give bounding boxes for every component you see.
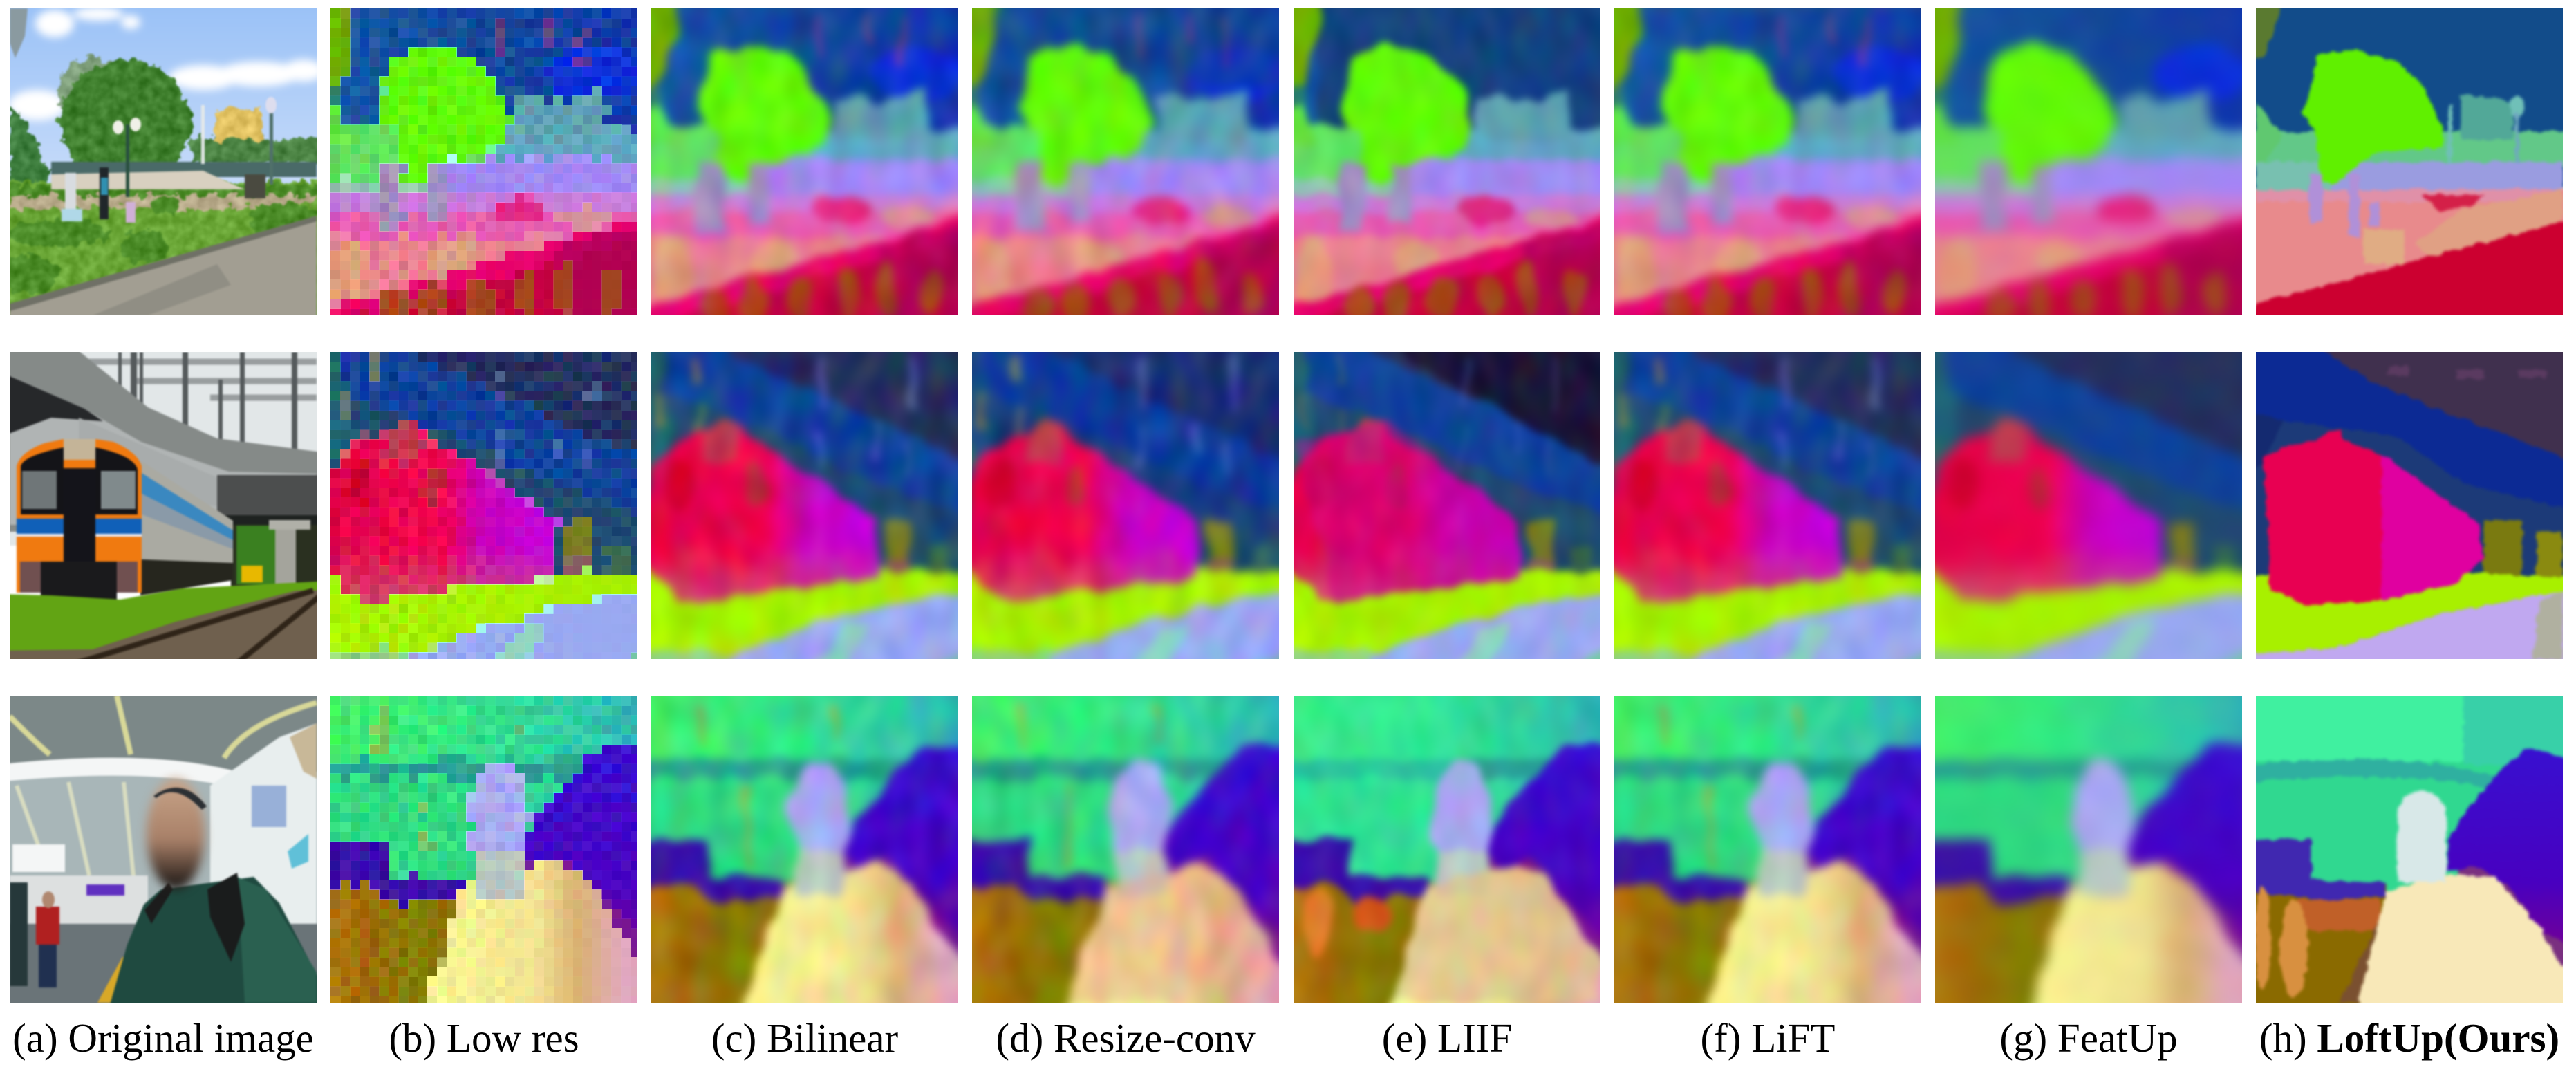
caption: (f) LiFT: (f) LiFT xyxy=(1701,1015,1835,1061)
caption: (g) FeatUp: (g) FeatUp xyxy=(1999,1015,2178,1061)
panel: row 1 bilinear features xyxy=(651,8,958,315)
panel: row 1 LoftUp features xyxy=(2256,8,2563,315)
panel: row 3 resize-conv features xyxy=(931,654,1325,1048)
panel: row 2 LoftUp features xyxy=(2256,352,2563,659)
panel: row 3 LiFT features xyxy=(1573,654,1967,1048)
caption: (b) Low res: (b) Low res xyxy=(389,1015,579,1061)
panel: row 1 low res features xyxy=(330,8,637,315)
panel: row 3 LoftUp features xyxy=(2228,668,2576,1035)
panel: row 2 FeatUp features xyxy=(1935,352,2242,659)
caption: (h) LoftUp(Ours): (h) LoftUp(Ours) xyxy=(2259,1015,2559,1061)
panel: row 2 original image, train under viaduct xyxy=(10,352,317,659)
panel: row 1 LIIF features xyxy=(1294,8,1600,315)
panel: row 3 FeatUp features xyxy=(1894,654,2288,1048)
panel: row 3 original image, man in train station xyxy=(10,696,317,1003)
panel: row 2 LIIF features xyxy=(1294,352,1600,659)
panel: row 3 bilinear features xyxy=(651,696,958,1003)
panel: row 1 original image, park scene xyxy=(10,8,317,315)
panel: row 2 low res features xyxy=(330,352,637,659)
panel: row 3 LIIF features xyxy=(1252,654,1646,1048)
caption: (a) Original image: (a) Original image xyxy=(12,1015,314,1061)
panel: row 2 bilinear features xyxy=(651,352,958,659)
panel: row 2 resize-conv features xyxy=(972,352,1279,659)
panel: row 3 low res features xyxy=(330,696,637,1003)
panel: row 1 LiFT features xyxy=(1614,8,1921,315)
panel: row 2 LiFT features xyxy=(1614,352,1921,659)
caption: (d) Resize-conv: (d) Resize-conv xyxy=(996,1015,1256,1061)
panel: row 1 resize-conv features xyxy=(972,8,1279,315)
panel: row 1 FeatUp features xyxy=(1935,8,2242,315)
caption: (e) LIIF: (e) LIIF xyxy=(1382,1015,1512,1061)
caption: (c) Bilinear: (c) Bilinear xyxy=(711,1015,898,1061)
